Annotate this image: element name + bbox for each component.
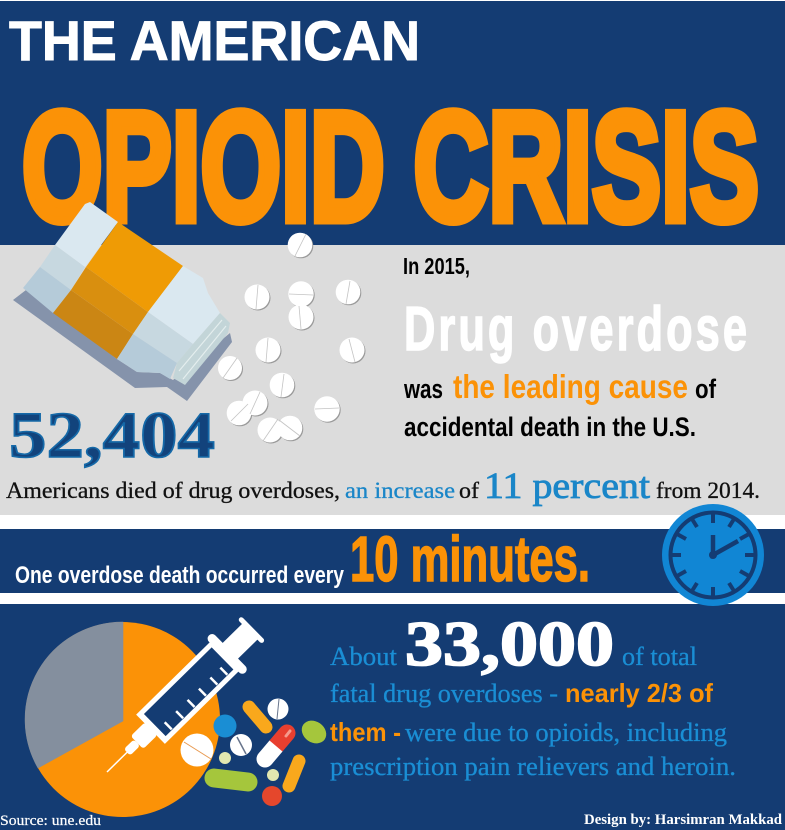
text: them were due to opioids: them -	[330, 717, 401, 747]
icon: clock	[662, 504, 764, 606]
panel: opioid share background	[0, 604, 785, 830]
text: Drug overdose: Drug overdose	[404, 296, 747, 364]
text: prescription pain relievers: prescription pain relievers and heroin.	[330, 752, 736, 781]
title line 1: THE AMERICAN	[9, 9, 420, 72]
text: Americans died sentence: 11 percent	[484, 466, 651, 507]
text: About 33,000 of total: of total	[622, 642, 697, 671]
text: was the leading cause of: was	[403, 374, 443, 404]
panel: statistics background	[0, 245, 785, 515]
icon: assorted pills	[180, 698, 331, 806]
text: In 2015: In 2015,	[403, 253, 470, 279]
pie chart: opioid share of overdoses	[25, 622, 220, 817]
text: fatal drug overdoses: nearly 2/3 of	[565, 678, 713, 708]
text: them were due to opioids: were due to opioids, including	[405, 718, 727, 747]
text: designer credit: Design by: Harsimran Makkad	[584, 812, 783, 828]
panel: time band background	[0, 529, 785, 593]
panel: header background	[0, 1, 785, 245]
text: was the leading cause of: the leading cause	[453, 368, 688, 405]
text: Americans died sentence: Americans died of drug overdoses,	[6, 478, 340, 503]
text: About 33,000 of total: About	[330, 642, 398, 671]
text: fatal drug overdoses: fatal drug overdoses -	[330, 679, 558, 708]
icon: spilled pill bottle	[13, 202, 364, 442]
icon: scattered white pills	[218, 233, 364, 442]
big number 52,404: 52,404	[9, 399, 215, 472]
text: About 33,000 of total: 33,000	[405, 608, 614, 679]
text: Americans died sentence: of	[459, 478, 479, 503]
text: accidental death: accidental death in the U.S.	[404, 412, 696, 442]
text: 10 minutes: 10 minutes.	[350, 523, 590, 595]
text: source: Source: une.edu	[0, 813, 102, 829]
text: One overdose death occurred every: One overdose death occurred every	[15, 562, 345, 589]
text: Americans died sentence: from 2014.	[656, 478, 760, 503]
text: was the leading cause of: of	[695, 374, 717, 404]
text: Americans died sentence: an increase	[345, 478, 455, 503]
icon: syringe	[89, 610, 271, 791]
